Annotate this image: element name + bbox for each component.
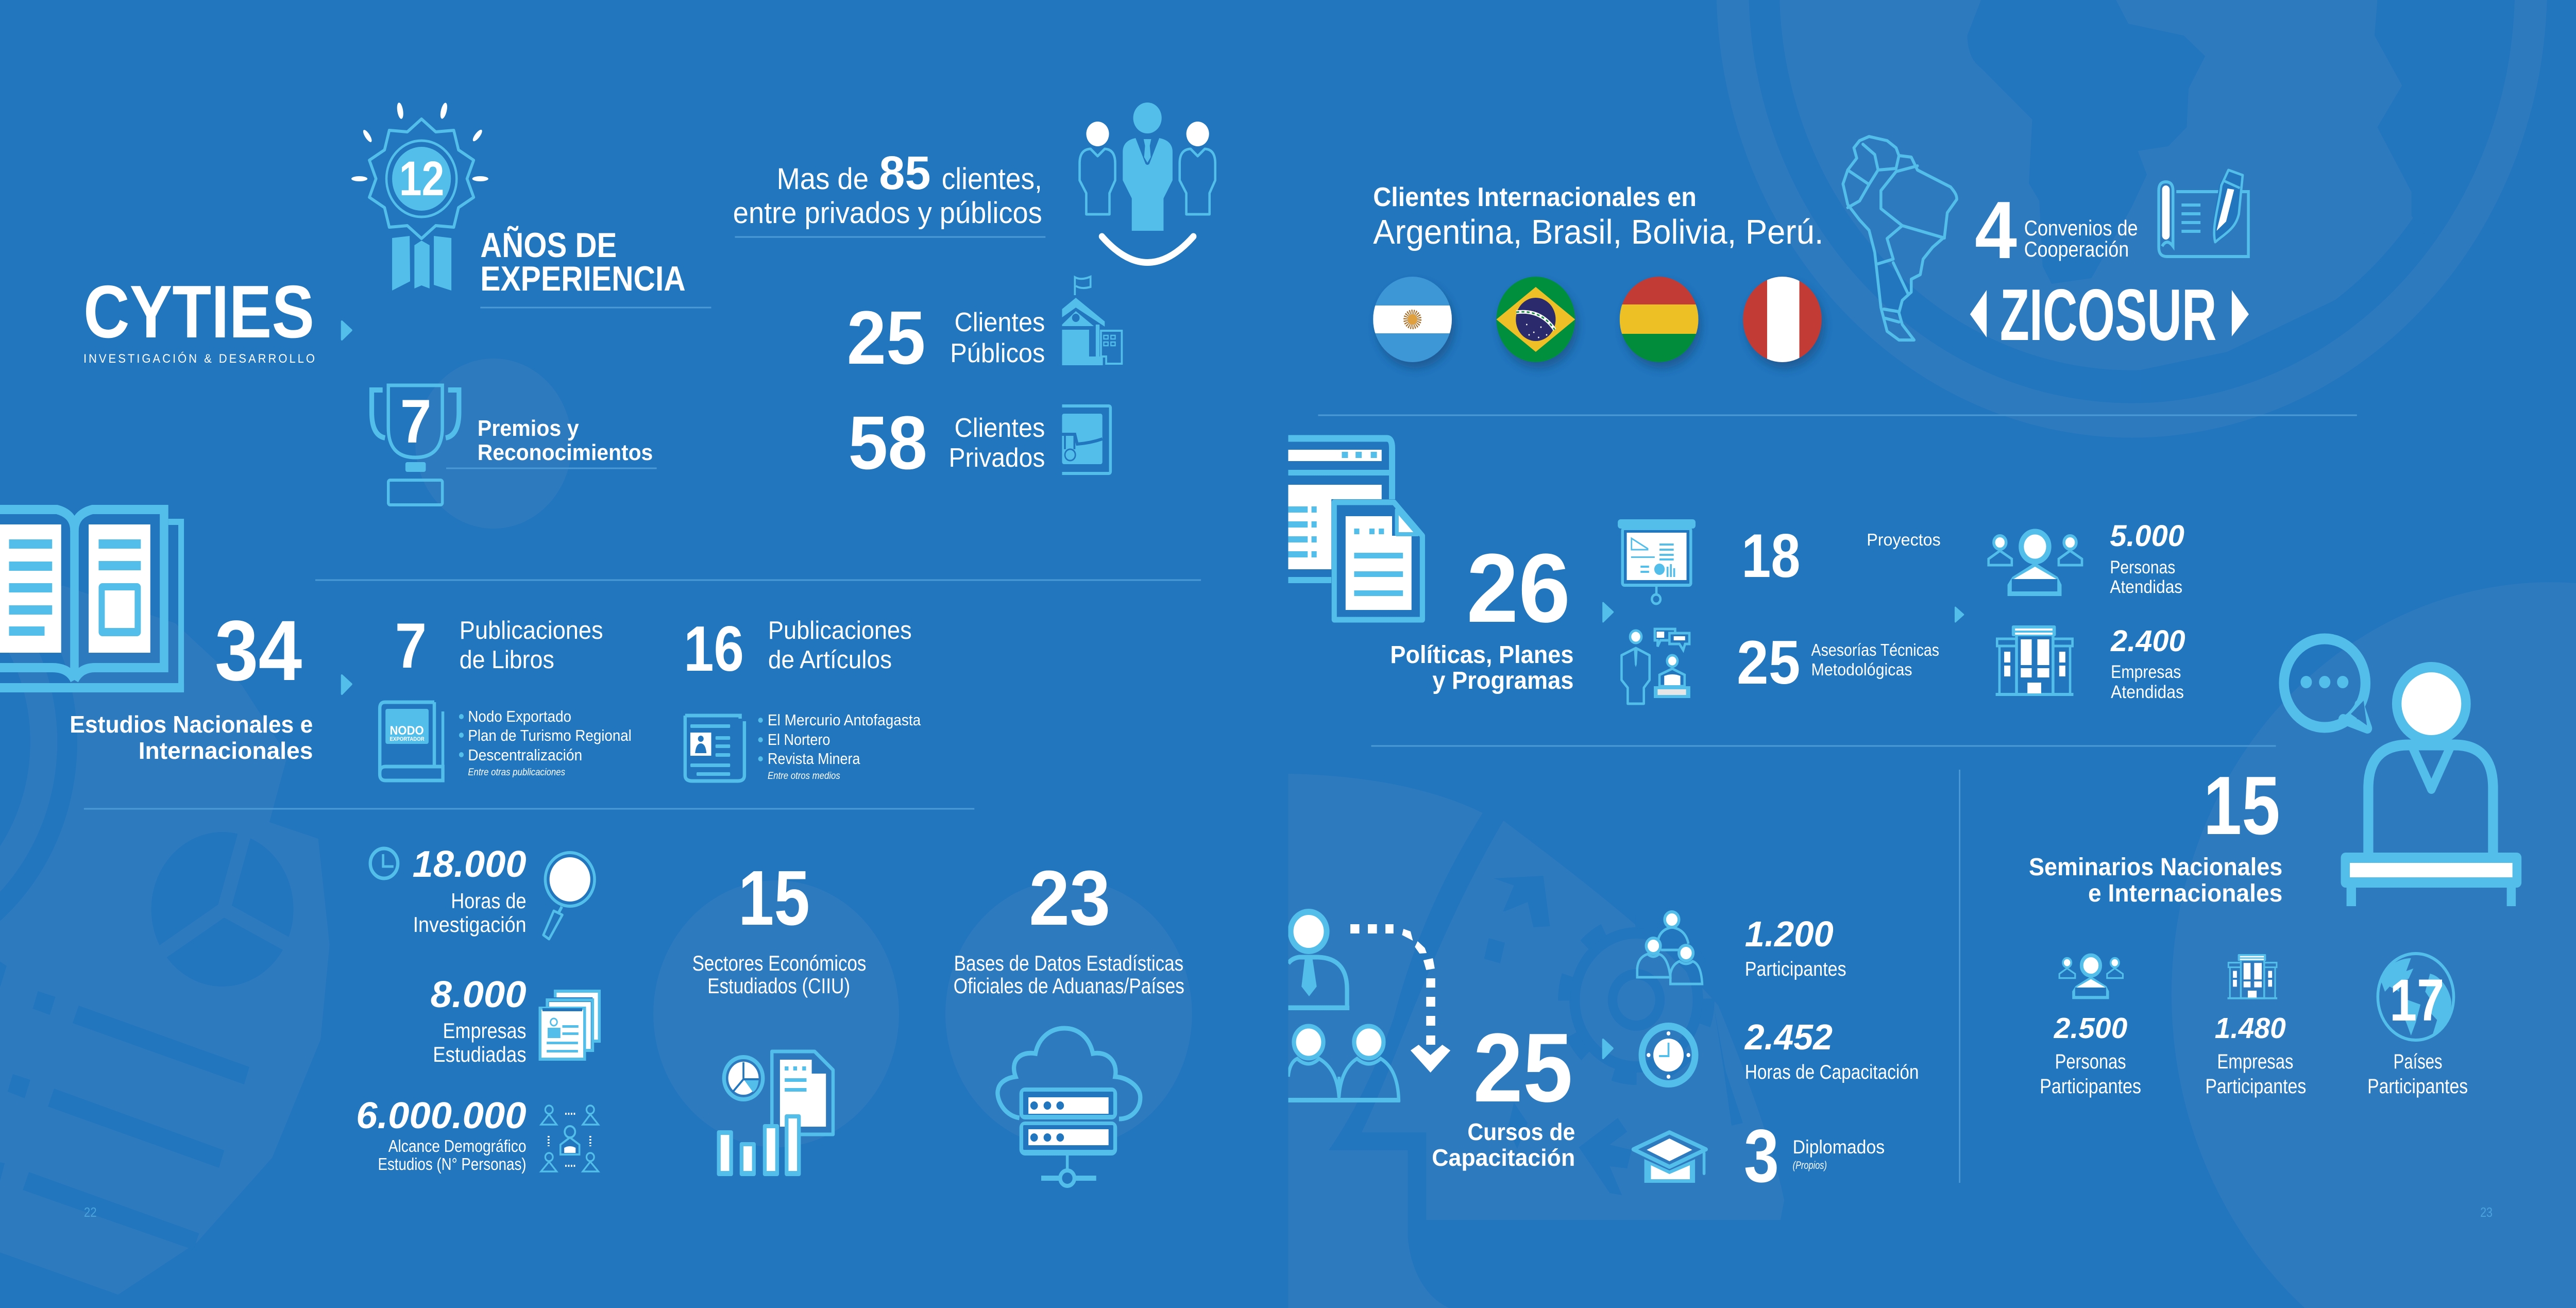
panel: proyectos y asesorías: 25: [1737, 628, 1800, 697]
icon: trophy 7: [372, 385, 459, 505]
icon: book Nodo Exportador: NODO: [389, 723, 424, 737]
panel: awards: [372, 385, 657, 505]
panel: publicaciones de libros: 7: [395, 610, 427, 682]
arrow: cursos to participantes: [1603, 1040, 1613, 1058]
text: mas de 85 clientes: entre privados y públicos: [733, 196, 1042, 229]
panel: seminarios: e Internacionales: [2088, 879, 2282, 907]
icon: globe 17: 17: [2389, 967, 2444, 1033]
arrow: dotted curve: [1350, 924, 1450, 1073]
icon: South America map: [1843, 137, 1957, 340]
stat: 2.400 empresas: [2110, 624, 2185, 702]
panel: horas de investigación: Horas de: [451, 888, 527, 913]
icon: network of people: [541, 1106, 598, 1171]
list: artículos: [758, 711, 921, 781]
icon: documents: [1288, 438, 1425, 623]
panel: clientes internacionales: Argentina, Brasil, Bolivia, Perú.: [1373, 213, 1823, 251]
list: libros: Plan de Turismo Regional: [468, 727, 632, 744]
icon: flag Argentina: [1373, 277, 1452, 362]
panel: participantes, horas y diplomados: Diplomados: [1793, 1136, 1885, 1158]
panel: sectores económicos: [692, 855, 866, 1176]
icon: clock: [370, 848, 398, 878]
panel: alcance demográfico: 6.000.000: [356, 1094, 527, 1136]
panel: políticas, planes y programas: 26: [1466, 533, 1570, 643]
panel: publicaciones de libros: Publicaciones: [460, 616, 603, 644]
icon: instructor and students: [1288, 912, 1400, 1102]
stat: clientes privados: Clientes: [955, 413, 1045, 443]
panel: seminarios: 15: [2204, 759, 2280, 852]
stat: estudios nacionales: Estudios Nacionales e: [70, 711, 313, 738]
panel: proyectos y asesorías: Metodológicas: [1811, 660, 1912, 679]
panel: horas de investigación: 18.000: [413, 843, 527, 885]
panel: políticas, planes y programas: Políticas, Planes: [1390, 640, 1573, 668]
stat: estudios nacionales: [70, 603, 313, 764]
panel: cursos de capacitación: [1288, 912, 1575, 1171]
icon: speaker at podium: [2284, 639, 2521, 906]
panel: participantes, horas y diplomados: 3: [1744, 1114, 1779, 1198]
icon: book Nodo Exportador: EXPORTADOR: [389, 736, 425, 742]
stat: 2.500 personas: Participantes: [2040, 1075, 2141, 1098]
stat: clientes públicos: [847, 295, 1045, 380]
list: artículos: El Mercurio Antofagasta: [768, 711, 921, 729]
panel: years of experience: [351, 102, 711, 308]
panel: participantes, horas y diplomados: 1.200: [1745, 914, 1834, 955]
list: libros: Nodo Exportado: [468, 708, 571, 725]
panel: publicaciones de libros: [380, 610, 632, 782]
panel: sectores económicos: Sectores Económicos: [692, 950, 866, 975]
stat: estudios nacionales: 34: [215, 603, 302, 698]
panel: proyectos y asesorías: Proyectos: [1867, 530, 1941, 549]
list: libros: [459, 708, 632, 777]
panel: políticas, planes y programas: y Programas: [1432, 666, 1573, 694]
panel: bases de datos: 23: [1029, 855, 1110, 941]
icon: globe 17: [2378, 954, 2454, 1040]
list: artículos: Entre otros medios: [768, 770, 840, 781]
heading: años de experiencia: AÑOS DE: [480, 226, 617, 265]
stat: clientes públicos: Clientes: [955, 307, 1045, 337]
icon: flag Brazil: [1496, 277, 1575, 362]
panel: personas y empresas atendidas: [1989, 519, 2185, 702]
stat: 2.500 personas: [2040, 1011, 2141, 1098]
icon: magnifier: [544, 853, 595, 939]
panel: participantes, horas y diplomados: Participantes: [1745, 958, 1846, 980]
icon: medal 12: 12: [399, 151, 444, 206]
icon: flag Bolivia: [1620, 277, 1699, 362]
panel: participantes, horas y diplomados: Horas de Capacitación: [1745, 1061, 1919, 1083]
stat: 2.400 empresas: Atendidas: [2111, 683, 2184, 702]
panel: convenios de cooperación: 4: [1975, 185, 2017, 276]
icon: private door: [1062, 406, 1110, 473]
panel: seminarios: Seminarios Nacionales: [2029, 853, 2282, 880]
panel: bases de datos: [954, 855, 1184, 1186]
panel: políticas, planes y programas: [1288, 438, 1573, 694]
icon: charts and document: [717, 1051, 833, 1176]
logo: ZICOSUR: ZICOSUR: [2000, 274, 2216, 355]
icon: advisor and client: [1621, 629, 1690, 704]
icon: people with smile: [1080, 103, 1215, 263]
stat: clientes privados: [848, 400, 1045, 485]
panel: proyectos y asesorías: Asesorías Técnicas: [1811, 640, 1939, 659]
stat: clientes públicos: Públicos: [950, 338, 1045, 368]
arrow: CYTIES to experience: [342, 321, 351, 339]
stat: 5.000 personas: [2110, 519, 2184, 597]
stat: 2.400 empresas: 2.400: [2110, 624, 2185, 657]
panel: convenios de cooperación: [1975, 169, 2248, 276]
panel: CYTIES logo: CYTIES: [83, 270, 314, 353]
icon: trophy 7: 7: [400, 387, 431, 456]
icon: flag Peru: [1743, 277, 1822, 362]
panel: alcance demográfico: Estudios (N° Personas): [378, 1154, 527, 1174]
stat: 1.480 empresas: Participantes: [2205, 1075, 2306, 1098]
icon: company building: [2228, 954, 2277, 999]
icon: medal 12: [351, 102, 488, 291]
panel: participantes, horas y diplomados: (Propios): [1793, 1160, 1827, 1171]
panel: participantes, horas y diplomados: [1633, 912, 1919, 1198]
stat: 1.480 empresas: Empresas: [2217, 1050, 2294, 1073]
icon: training clock: [1642, 1026, 1695, 1084]
list: artículos: Revista Minera: [768, 750, 860, 768]
panel: horas de investigación: Investigación: [413, 912, 527, 937]
stat: clientes públicos: 25: [847, 295, 925, 380]
heading: años de experiencia: [480, 226, 686, 298]
panel: alcance demográfico: [356, 1094, 598, 1174]
panel: publicaciones de artículos: Publicaciones: [768, 616, 912, 644]
panel: proyectos y asesorías: 18: [1741, 522, 1800, 590]
panel: horas de investigación: [370, 843, 595, 939]
icon: people attended: [1989, 532, 2082, 596]
page number 23: 23: [2480, 1205, 2493, 1220]
panel: publicaciones de artículos: 16: [684, 614, 744, 685]
stat: 1.480 empresas: [2205, 1011, 2306, 1098]
panel: publicaciones de artículos: [684, 614, 921, 781]
icon: open book: [0, 509, 184, 692]
panel: bases de datos: Oficiales de Aduanas/Países: [954, 973, 1184, 998]
page number 22: 22: [84, 1205, 97, 1220]
panel: sectores económicos: Estudiados (CIIU): [707, 973, 850, 998]
icon: newspaper: [685, 716, 744, 781]
panel: empresas estudiadas: Empresas: [443, 1018, 527, 1043]
panel: seminarios: [2029, 639, 2521, 1098]
list: libros: Entre otras publicaciones: [468, 766, 565, 777]
panel: clients: [733, 103, 1215, 485]
panel: empresas estudiadas: [431, 973, 599, 1066]
stat: países participantes: Países: [2394, 1050, 2442, 1073]
panel: proyectos y asesorías: [1618, 519, 1941, 704]
panel: sectores económicos: 15: [738, 855, 810, 941]
panel: clientes internacionales: [1373, 182, 1823, 362]
text: mas de 85 clientes: Mas de: [776, 162, 869, 195]
text: mas de 85 clientes: 85: [879, 146, 931, 199]
stat: países participantes: Participantes: [2367, 1075, 2468, 1098]
panel: bases de datos: Bases de Datos Estadísticas: [954, 950, 1183, 975]
stat: 1.480 empresas: 1.480: [2215, 1011, 2286, 1044]
stat: países participantes: [2367, 1050, 2468, 1098]
panel: clientes internacionales: Clientes Internacionales en: [1373, 182, 1697, 212]
stat: 5.000 personas: Personas: [2110, 558, 2175, 577]
icon: team: [1637, 912, 1702, 984]
panel: CYTIES logo: INVESTIGACIÓN & DESARROLLO: [83, 351, 315, 365]
text: mas de 85 clientes: clientes,: [942, 162, 1042, 195]
stat: 2.500 personas: Personas: [2055, 1050, 2126, 1073]
stat: 5.000 personas: Atendidas: [2110, 577, 2182, 597]
icon: book Nodo Exportador: [380, 702, 443, 782]
stat: 2.500 personas: 2.500: [2054, 1011, 2127, 1044]
panel: cursos de capacitación: Cursos de: [1467, 1119, 1575, 1145]
text: premios y reconocimientos: [478, 415, 653, 465]
text: mas de 85 clientes: [733, 146, 1042, 229]
stat: 5.000 personas: 5.000: [2110, 519, 2184, 552]
panel: convenios de cooperación: Convenios de: [2024, 215, 2138, 240]
list: artículos: El Nortero: [768, 731, 830, 749]
panel: alcance demográfico: Alcance Demográfico: [388, 1136, 527, 1156]
icon: building: [1996, 625, 2073, 696]
stat: 2.400 empresas: Empresas: [2111, 663, 2181, 682]
heading: años de experiencia: EXPERIENCIA: [480, 259, 686, 298]
stat: clientes privados: 58: [848, 400, 927, 485]
icon: cloud servers: [997, 1028, 1140, 1186]
list: libros: Descentralización: [468, 746, 582, 764]
icon: presentation board: [1618, 519, 1696, 604]
stat: clientes privados: Privados: [949, 443, 1045, 472]
panel: participantes, horas y diplomados: 2.452: [1744, 1017, 1833, 1058]
icon: graduation cap: [1633, 1132, 1706, 1183]
panel: publicaciones de libros: de Libros: [460, 645, 554, 673]
panel: cursos de capacitación: 25: [1473, 1013, 1573, 1123]
stat: estudios nacionales: Internacionales: [139, 738, 313, 764]
icon: participants: [2059, 955, 2123, 999]
panel: convenios de cooperación: Cooperación: [2024, 236, 2129, 261]
text: premios y reconocimientos: Reconocimientos: [478, 439, 653, 465]
panel: empresas estudiadas: Estudiadas: [433, 1042, 527, 1066]
panel: empresas estudiadas: 8.000: [431, 973, 527, 1015]
icon: stacked papers: [540, 991, 599, 1059]
icon: public building: [1062, 277, 1122, 365]
arrow: proyectos to personas: [1955, 607, 1963, 622]
arrow: políticas to proyectos: [1603, 603, 1613, 622]
text: premios y reconocimientos: Premios y: [478, 415, 579, 440]
icon: scroll and pencil: [2159, 169, 2248, 257]
panel: cursos de capacitación: Capacitación: [1432, 1145, 1575, 1171]
arrow: estudios to publicaciones: [342, 675, 351, 694]
panel: publicaciones de artículos: de Artículos: [768, 645, 892, 673]
